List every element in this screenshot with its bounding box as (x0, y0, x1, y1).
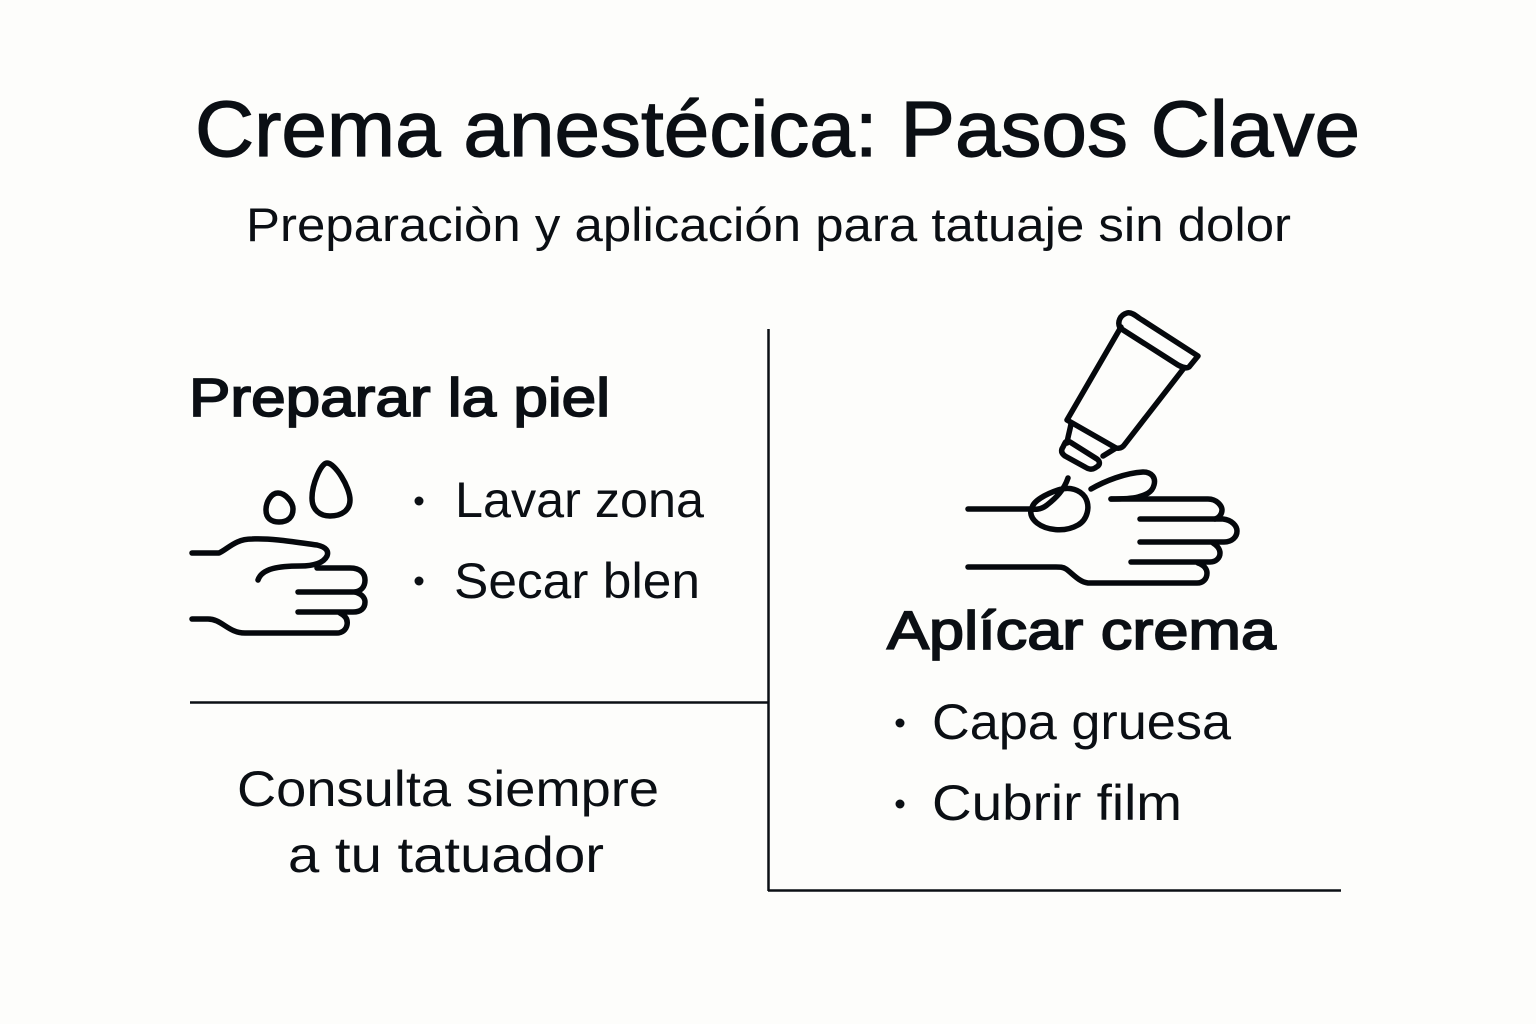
note: consulta a tu tatuador: a tu tatuador (288, 827, 604, 883)
note: consulta a tu tatuador: Consulta siempre (237, 761, 659, 817)
icon: hand with water drops (192, 463, 365, 633)
list: capa y film: Capa gruesa (932, 694, 1231, 750)
icon: cream tube over hand (968, 313, 1237, 583)
panel: aplicar crema (887, 313, 1277, 831)
list: lavar y secar: Secar blen (454, 553, 700, 609)
subtitle: Preparaciòn y aplicación para tatuaje sin dolor (246, 198, 1291, 251)
heading: aplicar crema: Aplícar crema (887, 601, 1277, 661)
list: capa y film (896, 694, 1231, 831)
note: consulta a tu tatuador (237, 761, 659, 883)
panel: preparar la piel (189, 368, 704, 633)
list: lavar y secar (414, 472, 704, 609)
heading: preparar la piel: Preparar la piel (189, 368, 610, 428)
list: capa y film: Cubrir film (932, 775, 1182, 831)
title: Crema anestécica: Pasos Clave (195, 84, 1360, 173)
list: lavar y secar: Lavar zona (455, 472, 704, 528)
